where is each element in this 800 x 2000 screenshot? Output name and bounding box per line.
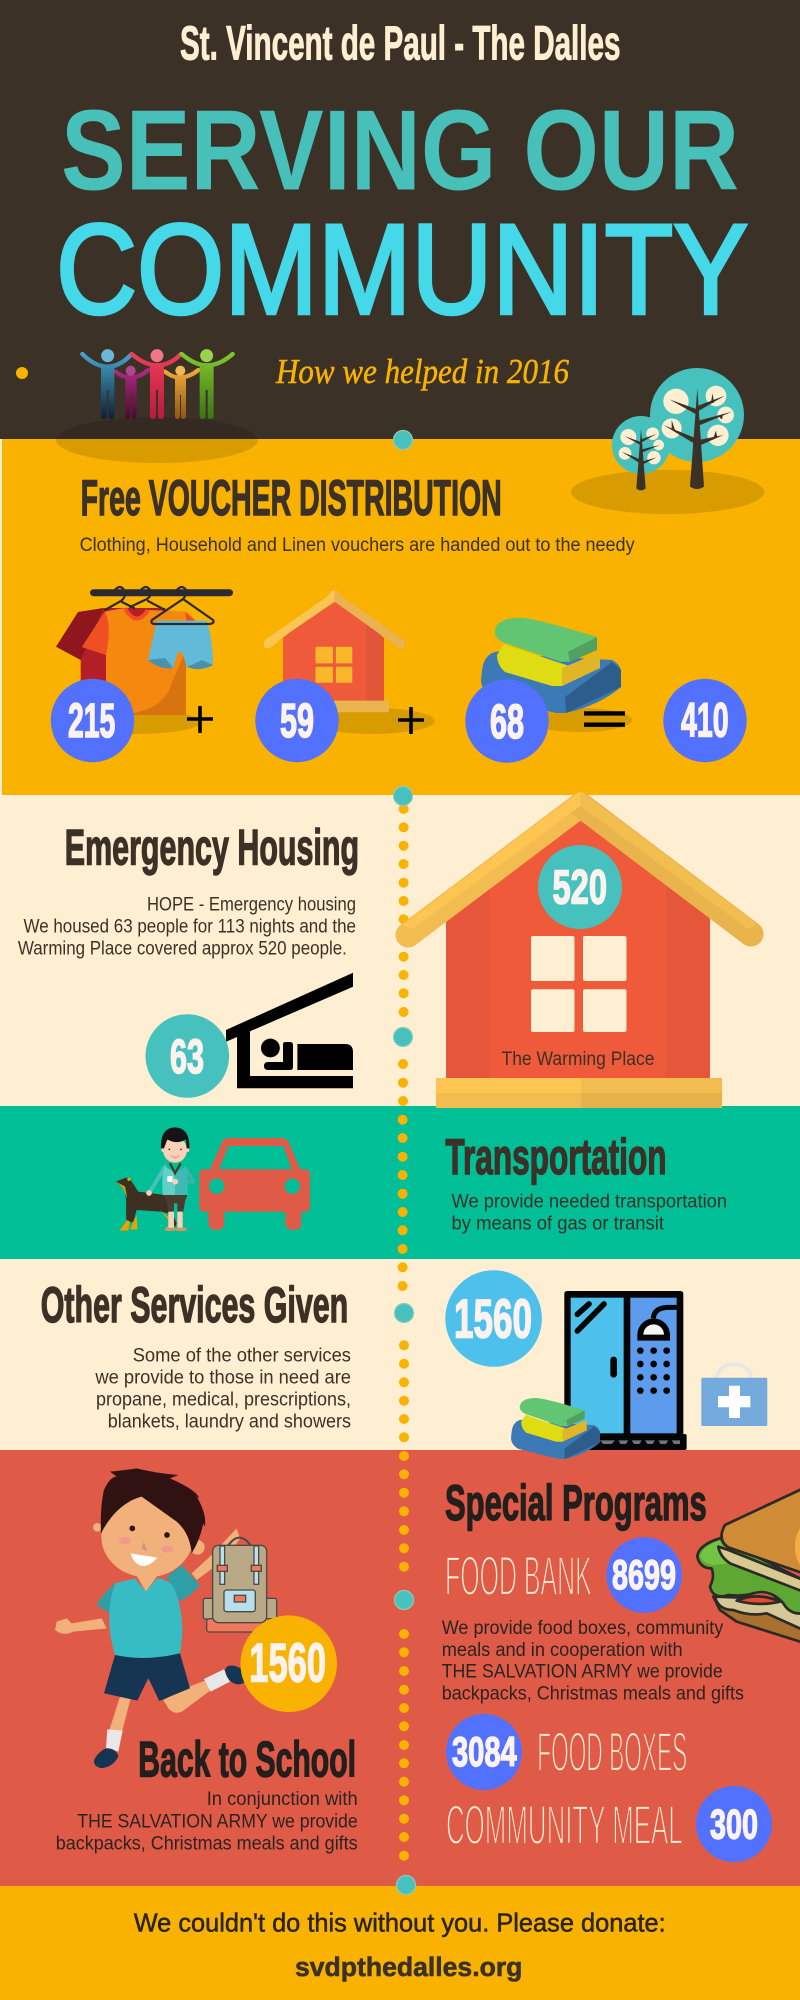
icon: boy jumping: [55, 1468, 247, 1768]
special programs description: backpacks, Christmas meals and gifts: [442, 1684, 744, 1705]
heading: free voucher distribution: Free VOUCHER DISTRIBUTION: [81, 470, 502, 526]
circle: 1560 services: 1560: [454, 1287, 532, 1349]
icon: two trees: [612, 368, 744, 490]
icon: clothes on a rack: [56, 587, 233, 715]
circle: 68 linen vouchers: [465, 679, 549, 763]
icon: red car: [199, 1138, 310, 1230]
special programs description: THE SALVATION ARMY we provide: [442, 1662, 723, 1683]
circle: 8699 food bank: [606, 1537, 682, 1613]
icon: small house: [264, 590, 405, 712]
panel: back to school and special programs background: [0, 1450, 800, 1886]
back to school description: [56, 1789, 358, 1854]
transportation description: by means of gas or transit: [452, 1213, 665, 1234]
icon: family of people with raised arms: [82, 349, 233, 419]
icon: equals sign: [584, 713, 625, 725]
shadow under towels: [528, 708, 632, 732]
circle: 300 community meals: 300: [710, 1800, 758, 1848]
title line two: COMMUNITY: [56, 198, 748, 341]
heading: other services given: Other Services Given: [41, 1277, 348, 1333]
transportation description: We provide needed transportation: [452, 1191, 727, 1212]
icon: sandwich: [697, 1488, 800, 1643]
circle: 68 linen vouchers: 68: [490, 695, 524, 749]
other services description: we provide to those in need are: [94, 1368, 351, 1389]
label: the warming place: The Warming Place: [502, 1049, 654, 1070]
emergency housing description: [18, 895, 356, 960]
other services description: [94, 1346, 351, 1433]
circle: 410 total vouchers: 410: [681, 694, 729, 748]
heading: transportation: Transportation: [445, 1129, 667, 1185]
emergency housing description: We housed 63 people for 113 nights and the: [24, 917, 356, 938]
label: food bank: FOOD BANK: [445, 1546, 592, 1608]
special programs description: [442, 1618, 744, 1705]
panel: header background: [0, 0, 800, 439]
circle: 1560 backpacks: 1560: [249, 1631, 326, 1694]
shadow under trees: [571, 470, 764, 514]
icon: backpack: [203, 1538, 277, 1632]
icon: the warming place house: [403, 791, 757, 1108]
timeline dots: [398, 804, 409, 1861]
icon: person with a dog: [116, 1127, 193, 1231]
other services description: blankets, laundry and showers: [108, 1412, 351, 1433]
panel: free voucher distribution background: [2, 439, 800, 795]
circle: 300 community meals: [696, 1786, 772, 1862]
circle: 3084 food boxes: [446, 1714, 522, 1790]
circle: 1560 backpacks: [240, 1615, 337, 1712]
circle: 520 people at the warming place: 520: [552, 860, 607, 914]
icon: small stacked towels: [511, 1398, 600, 1459]
shadow under clothes: [69, 710, 201, 734]
circle: 215 clothing vouchers: 215: [68, 694, 115, 748]
donation appeal: We couldn't do this without you. Please donate:: [134, 1908, 666, 1938]
organization name: St. Vincent de Paul - The Dalles: [180, 17, 620, 70]
panel: other services background: [0, 1259, 800, 1450]
circle: 215 clothing vouchers: [51, 679, 134, 762]
label: community meal: COMMUNITY MEAL: [446, 1795, 683, 1857]
circle: 3084 food boxes: 3084: [452, 1728, 517, 1775]
subtitle: How we helped in 2016: [275, 352, 569, 391]
panel: donation footer background: [0, 1886, 800, 2000]
panel: transportation background: [0, 1106, 800, 1259]
shadow under small house: [309, 708, 435, 734]
icon: person sleeping under shelter: [226, 973, 353, 1088]
icon: plus sign: [187, 706, 213, 733]
header accent dot: [16, 367, 28, 379]
other services description: Some of the other services: [133, 1346, 351, 1367]
emergency housing description: HOPE - Emergency housing: [147, 895, 356, 916]
timeline markers: [394, 430, 416, 1894]
back to school description: THE SALVATION ARMY we provide: [77, 1811, 358, 1832]
circle: 59 household vouchers: 59: [280, 694, 314, 748]
panel: emergency housing background: [0, 795, 800, 1106]
transportation description: [452, 1191, 727, 1234]
icon: shower stall: [564, 1291, 687, 1450]
other services description: propane, medical, prescriptions,: [96, 1390, 351, 1411]
circle: 63 people housed: [146, 1014, 229, 1098]
heading: back to school: Back to School: [138, 1732, 356, 1787]
label: food boxes: FOOD BOXES: [537, 1721, 687, 1784]
back to school description: In conjunction with: [207, 1789, 358, 1810]
website address: svdpthedalles.org: [295, 1952, 522, 1982]
emergency housing description: Warming Place covered approx 520 people.: [18, 939, 347, 960]
icon: plus sign: [398, 707, 424, 734]
back to school description: backpacks, Christmas meals and gifts: [56, 1833, 358, 1854]
circle: 520 people at the warming place: [538, 845, 622, 929]
title line one: SERVING OUR: [61, 87, 739, 214]
special programs description: We provide food boxes, community: [442, 1618, 724, 1639]
circle: 8699 food bank: 8699: [612, 1550, 676, 1598]
circle: 59 household vouchers: [255, 679, 339, 762]
circle: 410 total vouchers: [663, 679, 747, 762]
shadow under people: [56, 417, 258, 463]
heading: emergency housing: Emergency Housing: [65, 820, 359, 875]
heading: special programs: Special Programs: [445, 1474, 707, 1531]
icon: stacked towels: [481, 618, 621, 713]
circle: 1560 services: [445, 1270, 542, 1367]
special programs description: meals and in cooperation with: [442, 1640, 683, 1661]
circle: 63 people housed: 63: [170, 1030, 204, 1084]
voucher description: Clothing, Household and Linen vouchers are handed out to the needy: [80, 535, 635, 556]
icon: medical kit: [701, 1364, 767, 1426]
